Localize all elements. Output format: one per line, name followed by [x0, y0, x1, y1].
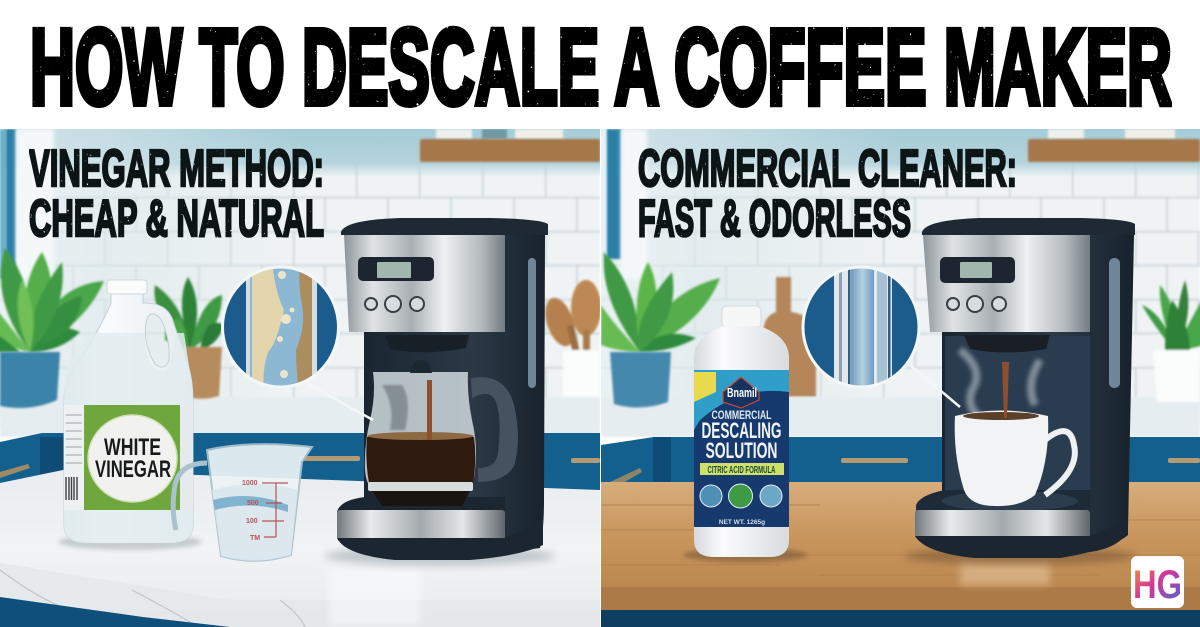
- label product name: COMMERCIAL: [712, 410, 772, 422]
- heading: vinegar method: VINEGAR METHOD:: [29, 140, 324, 198]
- base steel band right: [915, 510, 1090, 538]
- callout: scaled pipe: [222, 260, 338, 390]
- plant and pot left: [0, 248, 104, 408]
- base bottom: [337, 527, 543, 560]
- mug handle: [1045, 431, 1075, 495]
- side light strip: [528, 258, 536, 388]
- kitchen backdrop right: [601, 129, 1200, 429]
- coffee stream right: [1002, 362, 1009, 420]
- cup water: [212, 484, 298, 561]
- control display: [358, 257, 434, 281]
- coffee maker left: [325, 218, 555, 566]
- callout: clean pipe: [803, 260, 919, 390]
- measuring cup: 100: [246, 518, 258, 525]
- drip head: [385, 335, 469, 352]
- label formula band: CITRIC ACID FORMULA: [708, 465, 776, 476]
- label brand: Bnamil: [727, 385, 757, 400]
- limescale left: [252, 269, 284, 383]
- jug green label: [84, 405, 180, 510]
- bottle body: [694, 326, 789, 557]
- base bottom right: [915, 520, 1128, 558]
- carafe: [365, 360, 518, 506]
- side light strip right: [1109, 258, 1120, 388]
- heading: vinegar method: CHEAP & NATURAL: [29, 190, 324, 248]
- plant and pot right: [601, 252, 720, 408]
- back counter and cabinets: [0, 397, 600, 497]
- chamber back: [945, 336, 1090, 501]
- machine lid: [341, 218, 548, 235]
- heading: commercial cleaner: FAST & ODORLESS: [638, 190, 911, 248]
- limescale right: [296, 272, 312, 383]
- jug label text: VINEGAR: [95, 456, 171, 483]
- barcode: [66, 477, 77, 500]
- heading: commercial cleaner: [638, 140, 1017, 248]
- carafe grime: [382, 385, 408, 430]
- cup scale: [262, 483, 288, 537]
- jug label text: [95, 434, 171, 483]
- cutting board: [763, 277, 816, 397]
- marble countertop: [0, 470, 600, 627]
- machine tower right: [942, 235, 1134, 552]
- label net weight: NET WT. 1265g: [719, 519, 765, 526]
- jug body: [64, 292, 193, 543]
- carafe lid knob: [410, 360, 432, 373]
- plant and pot behind jug: [154, 277, 224, 399]
- jug shadow: [58, 534, 202, 550]
- cup body: [207, 444, 312, 561]
- machine shadow right: [905, 547, 1135, 565]
- panel: commercial cleaner: [601, 129, 1200, 627]
- label product name: SOLUTION: [706, 438, 778, 463]
- label product name: DESCALING: [702, 418, 782, 443]
- label circle: [88, 415, 177, 502]
- jug cap: [107, 280, 147, 294]
- machine lid right: [922, 218, 1135, 235]
- control display right: [940, 257, 1015, 283]
- jug liquid: [64, 333, 193, 543]
- mug body: [955, 410, 1048, 506]
- wooden countertop: [601, 482, 1200, 627]
- coffee: [366, 433, 475, 483]
- measuring cup: TM: [250, 535, 260, 542]
- bottle cap: [722, 306, 761, 328]
- label brand: [723, 377, 759, 408]
- mug: [955, 405, 1075, 506]
- wooden shelf right: [1028, 139, 1200, 162]
- measuring cup: 1000: [242, 480, 258, 487]
- measuring cup: [173, 444, 312, 561]
- machine steel head right: [923, 235, 1090, 332]
- coffee maker right: [905, 218, 1135, 565]
- base plate: [337, 497, 505, 513]
- plant and pot far right: [1142, 280, 1200, 402]
- descaling bottle: [683, 306, 807, 562]
- back counter and cabinets right: [601, 397, 1200, 490]
- base steel band: [337, 510, 505, 540]
- bottle label: [694, 370, 789, 527]
- base plate right: [916, 490, 1090, 513]
- callout line right: [910, 365, 960, 407]
- jug label text: WHITE: [104, 434, 161, 461]
- machine steel head: [344, 235, 505, 332]
- white divider: [600, 129, 602, 627]
- steam: [960, 350, 1040, 420]
- logo badge: HG: [1133, 563, 1182, 607]
- mug coffee: [963, 412, 1039, 420]
- drip head right: [964, 335, 1050, 352]
- panel: vinegar method: [0, 129, 601, 627]
- wooden shelf: [420, 139, 600, 162]
- label icons: [700, 484, 782, 508]
- vinegar jug: [58, 280, 202, 550]
- control buttons right: [947, 296, 1006, 312]
- control buttons: [365, 296, 424, 312]
- label formula band: [700, 463, 784, 476]
- coffee stream: [427, 380, 432, 440]
- carafe handle: [471, 377, 518, 482]
- bottle shadow: [683, 548, 807, 562]
- heading: vinegar method: [29, 140, 324, 248]
- label top band: [694, 370, 789, 430]
- label yellow tag: [694, 372, 716, 402]
- kitchen backdrop left: [0, 129, 600, 398]
- callout line left: [330, 398, 374, 421]
- machine tower: [364, 235, 545, 552]
- label product name: [702, 410, 782, 463]
- jug side label: [64, 405, 85, 510]
- base rings: [942, 491, 1078, 511]
- carafe glass: [364, 372, 476, 484]
- cup handle: [173, 463, 207, 530]
- measuring cup: 500: [247, 500, 259, 507]
- machine shadow: [325, 546, 555, 566]
- background spoons and crock: [544, 278, 600, 396]
- carafe collar: [368, 482, 473, 491]
